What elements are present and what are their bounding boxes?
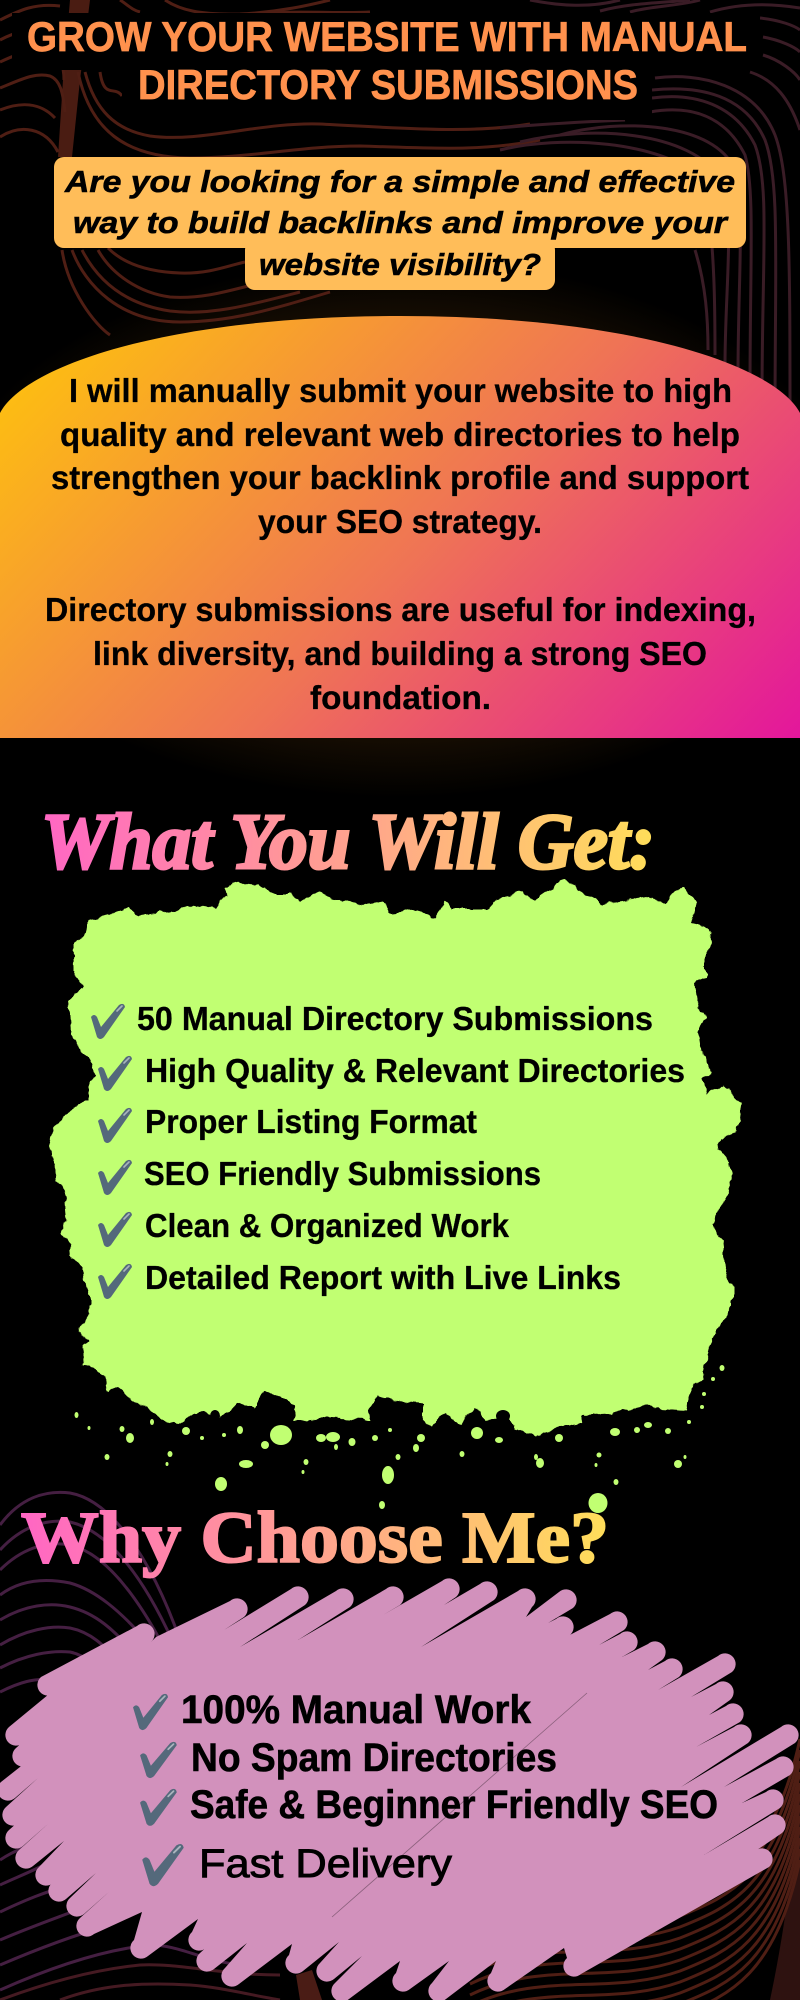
- panel: service description: strengthen your backlink profile and support: [51, 459, 749, 496]
- background contour lines: top left: [0, 0, 540, 335]
- reason 1: 100% Manual Work: [181, 1688, 532, 1732]
- question callout: way to build backlinks and improve your: [73, 205, 729, 240]
- heading: why choose me: Why Choose Me?: [21, 1497, 609, 1578]
- question callout: Are you looking for a simple and effective: [64, 164, 735, 199]
- title: [12, 13, 760, 120]
- background contour lines: bottom left: [0, 1492, 280, 2000]
- panel: green paint splash with checklist: [48, 879, 742, 1513]
- title: GROW YOUR WEBSITE WITH MANUAL: [27, 13, 747, 60]
- panel: service description: quality and relevant web directories to help: [60, 416, 740, 453]
- reason 2: No Spam Directories: [191, 1736, 557, 1780]
- panel: pink scribble with reasons: [0, 1578, 799, 2000]
- paint droplets: [74, 1365, 724, 1513]
- checklist item 4: SEO Friendly Submissions: [144, 1155, 541, 1192]
- checklist item 2: High Quality & Relevant Directories: [145, 1052, 685, 1089]
- question callout: [54, 157, 746, 290]
- reason 3: Safe & Beginner Friendly SEO: [190, 1783, 718, 1827]
- background contour lines: top right: [500, 0, 800, 420]
- checklist item 3: Proper Listing Format: [145, 1103, 477, 1140]
- panel: service description: [0, 316, 800, 738]
- title: DIRECTORY SUBMISSIONS: [138, 61, 638, 108]
- panel: service description: foundation.: [310, 679, 491, 716]
- panel: service description: Directory submissions are useful for indexing,: [45, 591, 756, 628]
- panel: service description: link diversity, and building a strong SEO: [93, 635, 707, 672]
- checklist item 1: 50 Manual Directory Submissions: [137, 1000, 653, 1037]
- panel: service description: I will manually submit your website to high: [69, 372, 732, 409]
- checklist item 5: Clean & Organized Work: [145, 1207, 510, 1244]
- question callout: website visibility?: [259, 247, 541, 282]
- background contour lines: bottom right: [296, 1739, 800, 2000]
- checklist item 6: Detailed Report with Live Links: [145, 1259, 621, 1296]
- reason 4: Fast Delivery: [199, 1842, 452, 1886]
- panel: service description: your SEO strategy.: [258, 503, 542, 540]
- heading: what you will get: What You Will Get:: [41, 799, 655, 886]
